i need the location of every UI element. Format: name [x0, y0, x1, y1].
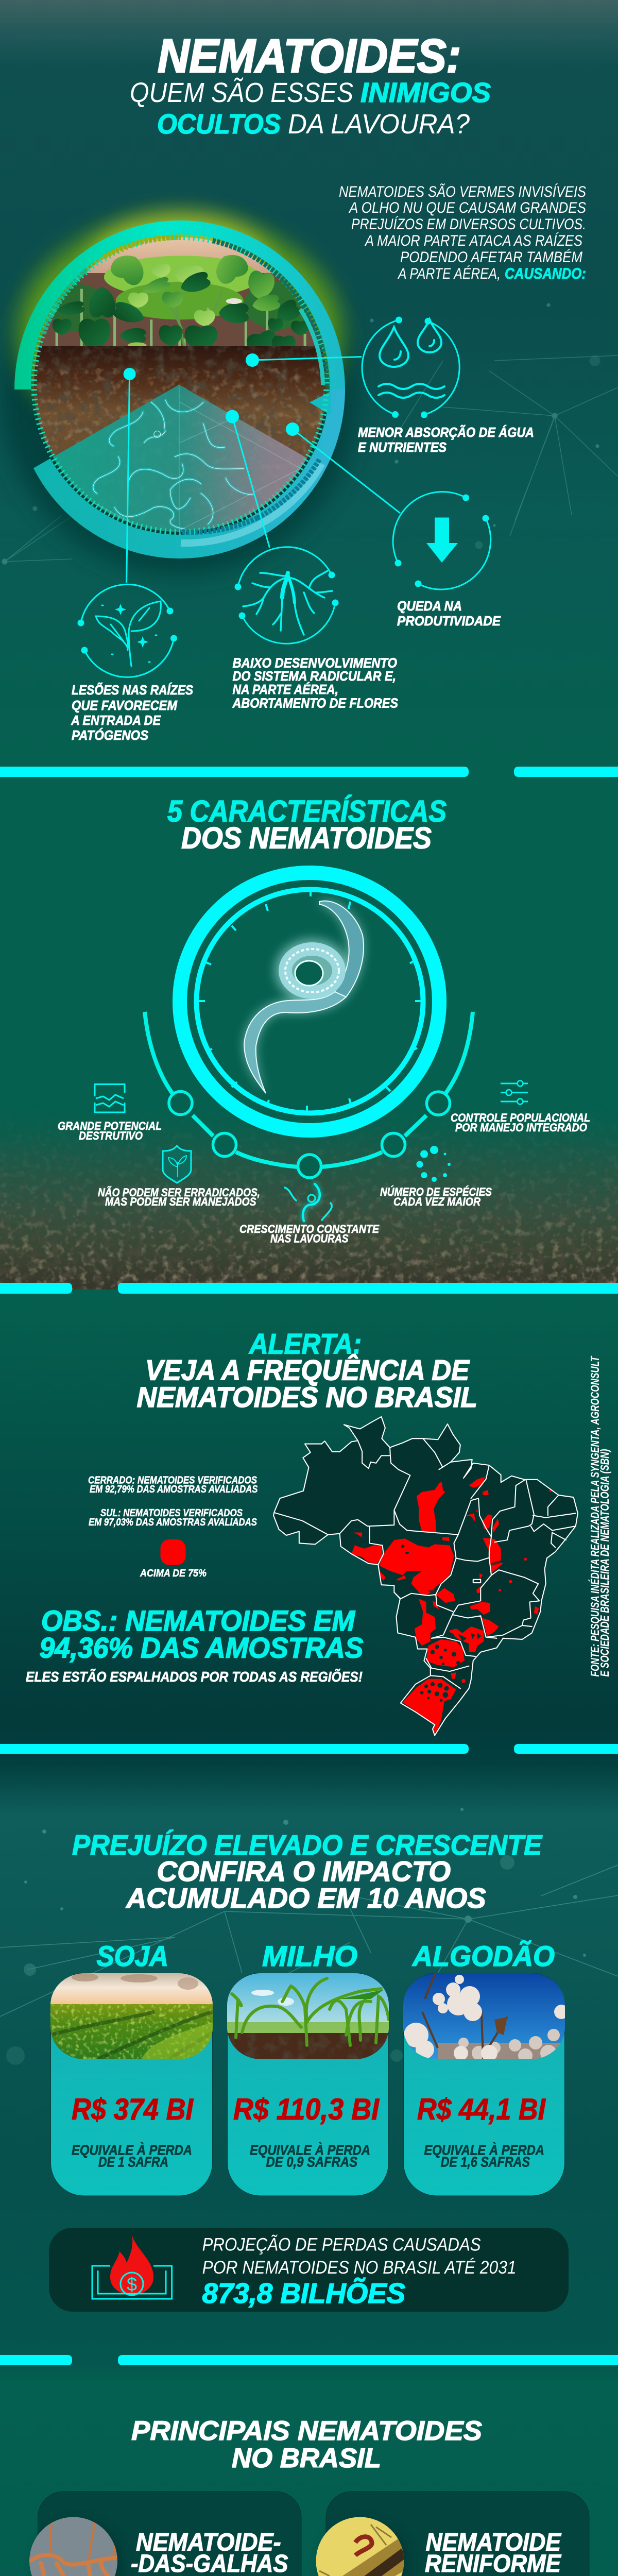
characteristic: population control: POR MANEJO INTEGRADO	[455, 1121, 587, 1134]
legend: EM 92,79% DAS AMOSTRAS AVALIADAS	[90, 1484, 258, 1495]
label: lesions	[71, 682, 194, 743]
characteristic: population control	[451, 1081, 590, 1134]
characteristic: cannot be eradicated	[98, 1146, 260, 1208]
heading	[131, 2416, 482, 2473]
section 2: five characteristics	[0, 794, 618, 1290]
heading: 5 CARACTERÍSTICAS	[167, 794, 447, 828]
label: water absorption: E NUTRIENTES	[358, 439, 447, 455]
characteristic: constant growth: CRESCIMENTO CONSTANTE	[239, 1223, 380, 1235]
intro text: PODENDO AFETAR TAMBÉM	[400, 249, 582, 266]
card: soja: EQUIVALE À PERDA	[72, 2142, 192, 2158]
observation: OBS.: NEMATOIDES EM	[41, 1604, 355, 1637]
card: milho: R$ 110,3 BI	[233, 2093, 380, 2126]
characteristic: constant growth: NAS LAVOURAS	[270, 1232, 349, 1245]
label: roots: BAIXO DESENVOLVIMENTO	[233, 655, 397, 671]
network background	[2, 303, 618, 564]
projection panel: POR NEMATOIDES NO BRASIL ATÉ 2031	[202, 2258, 517, 2278]
card: algodão	[403, 1940, 569, 2196]
intro text: A OLHO NU QUE CAUSAM GRANDES	[348, 199, 586, 216]
map of Brazil	[273, 1417, 578, 1735]
icon: water absorption	[362, 316, 459, 418]
network background	[0, 1808, 618, 2065]
label: water absorption: MENOR ABSORÇÃO DE ÁGUA	[358, 425, 534, 440]
title: QUEM SÃO ESSES	[130, 77, 353, 108]
card: soja: SOJA	[97, 1940, 168, 1972]
source note: FONTE: PESQUISA INÉDITA REALIZADA PELA SYNGENTA, AGROCONSULT	[588, 1355, 602, 1676]
label: lesions: LESÕES NAS RAÍZES	[72, 682, 194, 698]
heading: CONFIRA O IMPACTO	[157, 1855, 451, 1887]
heading: PREJUÍZO ELEVADO E CRESCENTE	[72, 1829, 543, 1861]
card: nematoide reniforme: NEMATOIDE	[425, 2529, 562, 2556]
lower arc with nodes	[145, 1012, 473, 1178]
soybean plants	[52, 255, 310, 346]
characteristic: destructive potential	[58, 1084, 162, 1142]
card: milho: DE 0,9 SAFRAS	[266, 2154, 357, 2170]
icon: roots	[235, 547, 339, 643]
heading	[137, 1328, 477, 1413]
card: algodão: DE 1,6 SAFRAS	[441, 2154, 530, 2170]
nematode worms	[93, 400, 253, 529]
label: roots: DO SISTEMA RADICULAR E,	[233, 668, 396, 684]
characteristic: growing species count: NÚMERO DE ESPÉCIES	[380, 1185, 492, 1198]
central nematode	[244, 901, 364, 1093]
hologram wedge	[53, 384, 307, 532]
characteristic: cannot be eradicated: NÃO PODEM SER ERRADICADOS,	[98, 1186, 260, 1199]
label: roots: ABORTAMENTO DE FLORES	[232, 696, 399, 711]
characteristic: cannot be eradicated: MAS PODEM SER MANEJADOS	[105, 1195, 256, 1208]
legend: SUL: NEMATOIDES VERIFICADOS	[100, 1507, 243, 1519]
legend: EM 97,03% DAS AMOSTRAS AVALIADAS	[89, 1517, 258, 1528]
card: milho: EQUIVALE À PERDA	[250, 2142, 370, 2158]
icon: burning money	[92, 2234, 172, 2299]
card: nematoide das galhas: NEMATOIDE-	[136, 2529, 281, 2556]
heading: NEMATOIDES NO BRASIL	[137, 1381, 477, 1413]
label: roots: NA PARTE AÉREA,	[233, 682, 338, 697]
card: algodão: R$ 44,1 BI	[417, 2093, 546, 2126]
label: lesions: QUE FAVORECEM	[72, 698, 178, 713]
heading: VEJA A FREQUÊNCIA DE	[145, 1354, 470, 1386]
card: soja: R$ 374 BI	[72, 2093, 194, 2126]
intro text	[339, 183, 586, 282]
title: OCULTOS	[157, 109, 281, 140]
connector lines and dots	[124, 353, 400, 583]
characteristic: growing species count: CADA VEZ MAIOR	[393, 1195, 480, 1208]
label: roots	[232, 655, 399, 711]
label: productivity: PRODUTIVIDADE	[397, 613, 501, 629]
heading: ACUMULADO EM 10 ANOS	[125, 1882, 486, 1914]
observation: ELES ESTÃO ESPALHADOS POR TODAS AS REGIÕES!	[26, 1669, 363, 1685]
card: soja	[50, 1940, 213, 2196]
card: milho: MILHO	[262, 1940, 357, 1972]
heading	[72, 1829, 543, 1914]
characteristic: population control: CONTROLE POPULACIONAL	[451, 1111, 590, 1124]
icon: leaves with lesions	[77, 584, 177, 677]
label: productivity: QUEDA NA	[397, 598, 462, 614]
title: NEMATOIDES:	[158, 30, 461, 82]
observation	[26, 1604, 364, 1685]
section divider bars	[0, 767, 618, 2576]
label: productivity	[397, 598, 501, 629]
heading: ALERTA:	[248, 1328, 362, 1360]
card: algodão: ALGODÃO	[411, 1940, 555, 1972]
characteristic: growing species count	[380, 1146, 492, 1208]
dial ring band	[14, 221, 345, 389]
label: lesions: A ENTRADA DE	[71, 713, 161, 728]
intro text: A PARTE AÉREA,	[397, 265, 501, 282]
heading: DOS NEMATOIDES	[181, 822, 432, 855]
intro text: CAUSANDO:	[505, 265, 586, 282]
icon: burning money: $	[127, 2274, 137, 2295]
card: nematoide reniforme	[316, 2492, 589, 2576]
heading: PRINCIPAIS NEMATOIDES	[131, 2416, 482, 2446]
legend: ACIMA DE 75%	[140, 1568, 207, 1579]
projection panel: 873,8 BILHÕES	[202, 2277, 405, 2309]
section 4: accumulated losses	[0, 1808, 618, 2312]
projection panel	[49, 2228, 569, 2312]
legend: CERRADO: NEMATOIDES VERIFICADOS	[88, 1475, 258, 1486]
section 5: main nematodes	[29, 2416, 589, 2576]
section 3: alert and Brazil map	[26, 1328, 611, 1735]
title: DA LAVOURA?	[288, 109, 470, 140]
observation: 94,36% DAS AMOSTRAS	[39, 1631, 364, 1664]
dial rings	[180, 873, 439, 1130]
card: milho	[227, 1940, 389, 2196]
section 1: what are nematodes	[0, 30, 618, 743]
characteristic: destructive potential: DESTRUTIVO	[79, 1129, 143, 1142]
characteristic: constant growth	[239, 1184, 380, 1245]
label: water absorption	[358, 425, 534, 455]
intro text: A MAIOR PARTE ATACA AS RAÍZES	[364, 232, 582, 249]
hero circular soil illustration	[0, 214, 371, 574]
soil background	[0, 1121, 618, 1290]
title: INIMIGOS	[360, 77, 491, 108]
card: soja: DE 1 SAFRA	[98, 2154, 168, 2170]
card: nematoide das galhas	[29, 2492, 301, 2576]
card: algodão: EQUIVALE À PERDA	[424, 2142, 544, 2158]
heading	[167, 794, 447, 855]
source note	[588, 1355, 611, 1676]
source note: E SOCIEDADE BRASILEIRA DE NEMATOLOGIA (SBN)	[598, 1449, 611, 1676]
heading: NO BRASIL	[232, 2443, 381, 2473]
characteristic: destructive potential: GRANDE POTENCIAL	[58, 1120, 162, 1132]
label: lesions: PATÓGENOS	[72, 727, 149, 743]
title	[130, 30, 491, 140]
legend	[88, 1475, 258, 1579]
icon: productivity drop arrow	[393, 492, 491, 589]
projection panel: PROJEÇÃO DE PERDAS CAUSADAS	[202, 2235, 481, 2255]
